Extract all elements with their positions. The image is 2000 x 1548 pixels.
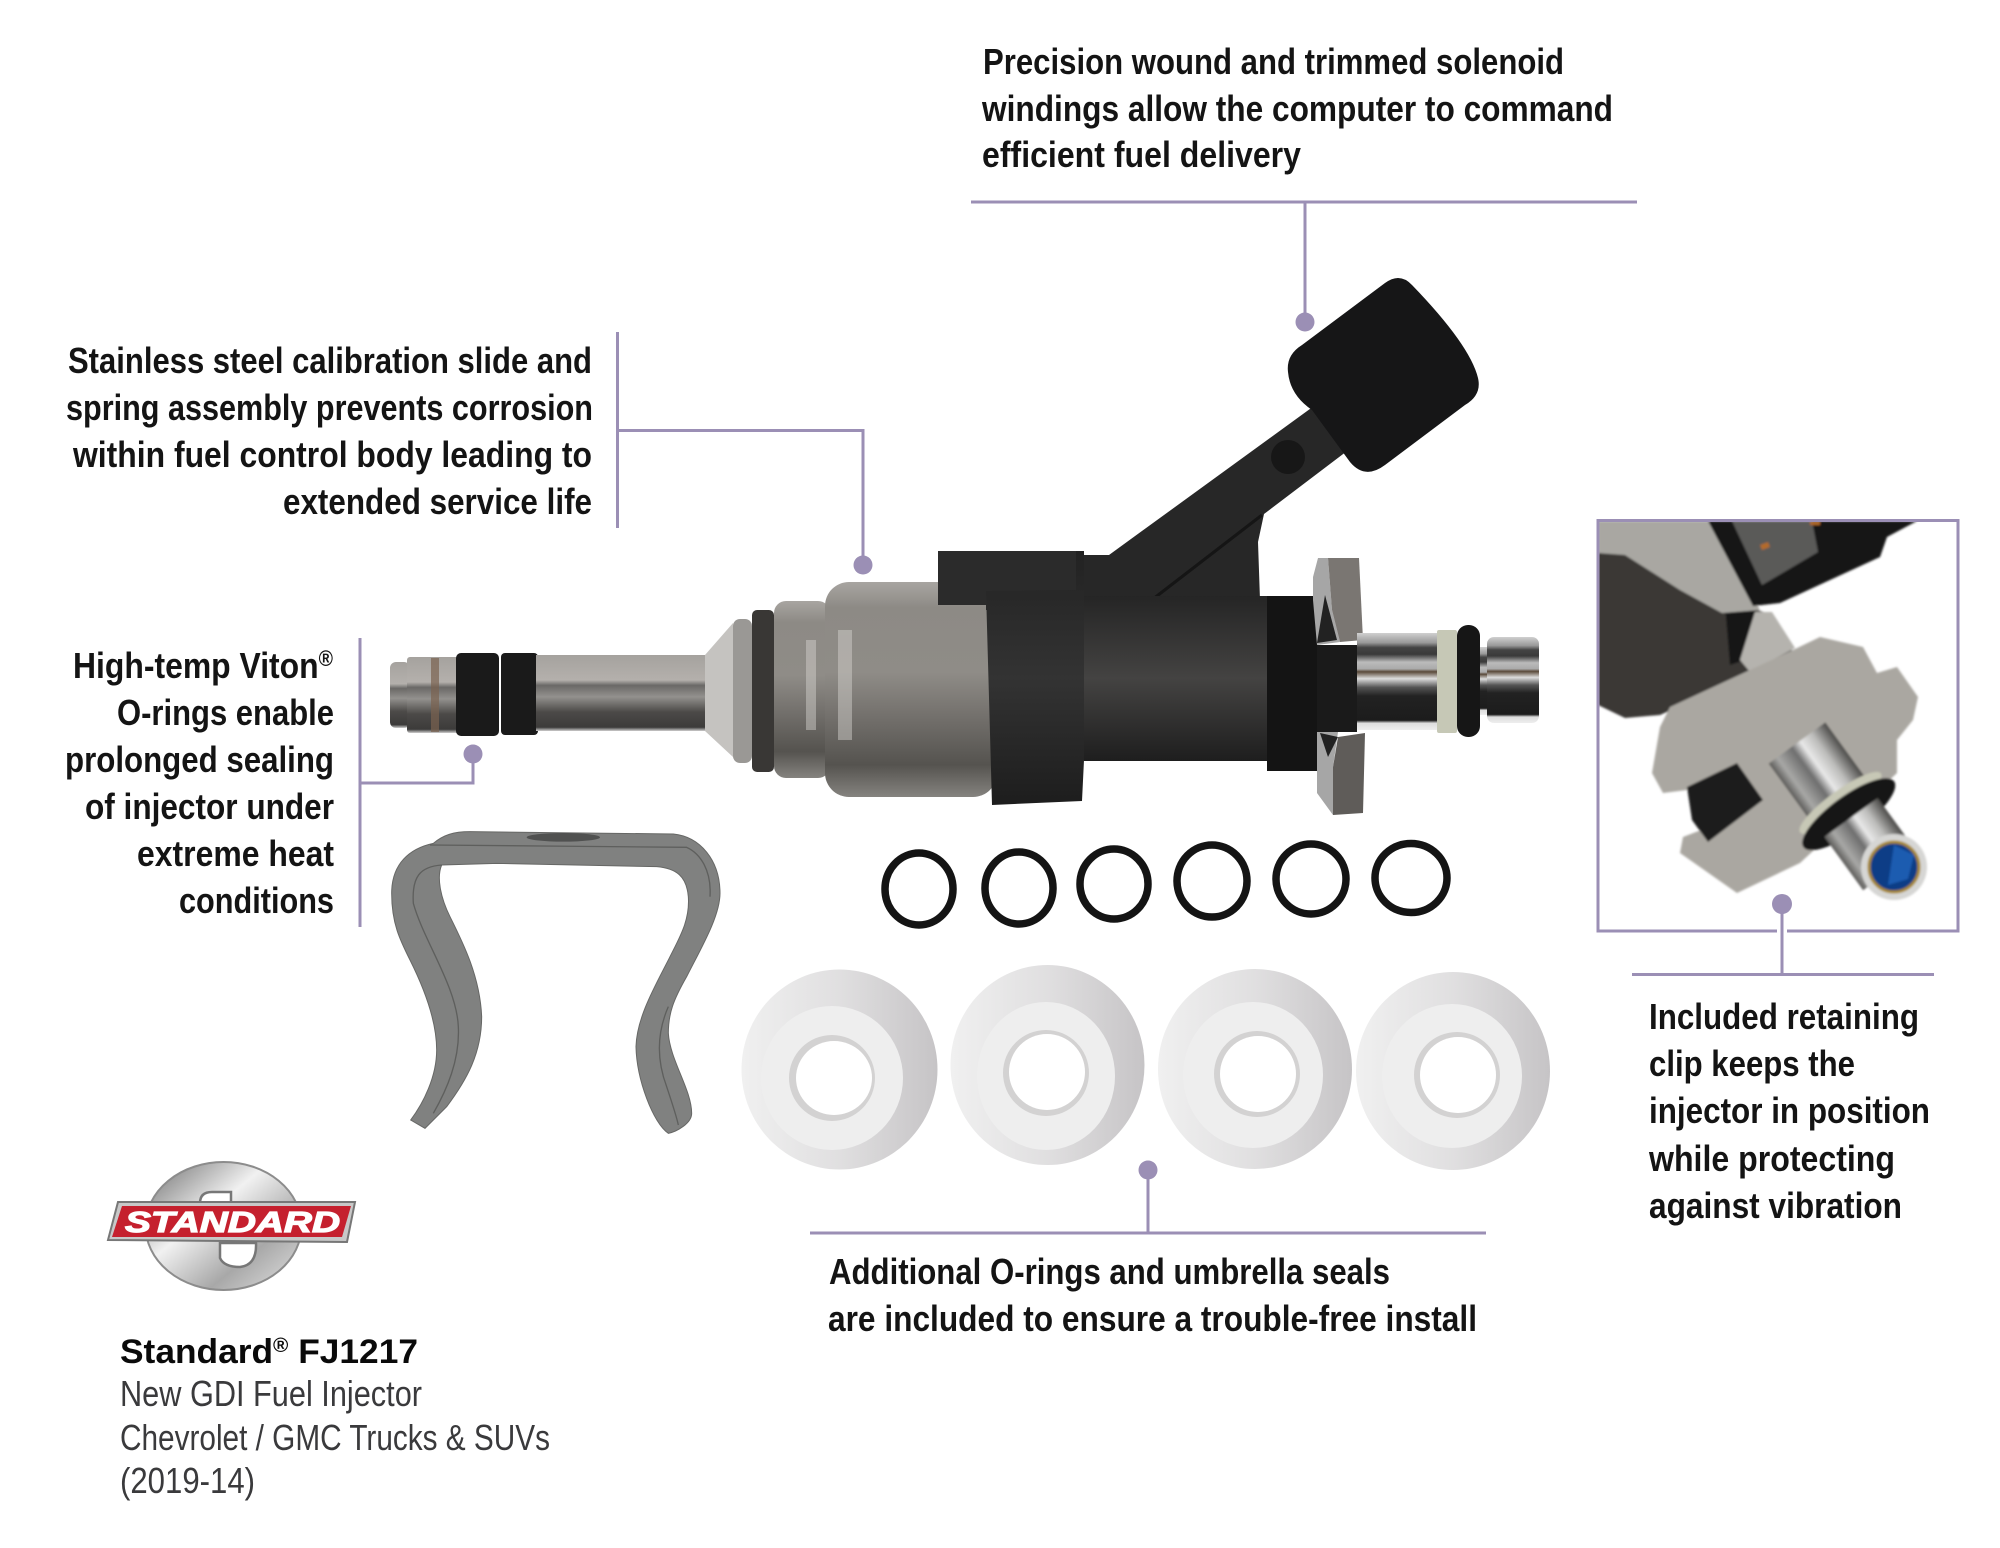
callout text: seals: are included to ensure a trouble-free install xyxy=(828,1298,1477,1339)
callout text: solenoid: efficient fuel delivery xyxy=(982,134,1301,175)
logo: red banner: STANDARD xyxy=(125,1207,340,1239)
seal 3 xyxy=(1158,969,1352,1169)
injector: rear collar xyxy=(1267,596,1317,771)
Standard logo xyxy=(108,1162,355,1290)
seal 2 xyxy=(950,965,1144,1165)
callout text: Viton O-rings: ® xyxy=(319,646,333,671)
inset: injector end face xyxy=(1861,834,1927,900)
inset: shaft and tip xyxy=(1768,722,1906,892)
callout: solenoid windings xyxy=(971,41,1637,332)
clip slot xyxy=(527,833,600,842)
clip details xyxy=(413,845,710,1125)
injector: nozzle O-rings xyxy=(456,653,538,736)
callout text: Viton O-rings xyxy=(65,645,334,921)
inset: silver casting xyxy=(1598,521,1760,613)
callout text: calibration slide: within fuel control body leading to xyxy=(72,434,592,475)
callout text: retaining clip: against vibration xyxy=(1649,1185,1902,1226)
injector: stainless body xyxy=(825,582,997,797)
product description: (2019-14) xyxy=(120,1460,255,1501)
callout text: calibration slide: spring assembly prevents corrosion xyxy=(66,387,593,428)
injector: white washer xyxy=(1437,630,1457,733)
inset: black clip tab xyxy=(1687,763,1763,842)
injector: arm screw mark xyxy=(1271,440,1305,474)
inset: black gap below connector xyxy=(1725,611,1754,665)
callout text: Viton O-rings: High-temp Viton xyxy=(73,645,350,686)
leader line: retaining clip xyxy=(1632,894,1934,974)
inset photo: retaining clip installed xyxy=(1598,520,1958,1226)
callout text: Viton O-rings: of injector under xyxy=(85,786,334,827)
leader line: seals xyxy=(810,1160,1486,1233)
product info xyxy=(120,1333,550,1501)
retaining clip xyxy=(392,832,720,1133)
injector: body highlights xyxy=(806,630,852,740)
callout: O-rings and umbrella seals xyxy=(810,1160,1486,1339)
injector: lower nozzle tip xyxy=(390,657,459,733)
flange centre block xyxy=(1317,645,1357,732)
injector: grooved section xyxy=(733,601,830,778)
seal 1 xyxy=(742,970,938,1170)
callout: Viton O-rings xyxy=(65,638,482,927)
leader line: calibration slide xyxy=(618,332,872,574)
injector: neck xyxy=(1478,647,1490,715)
logo: red banner xyxy=(108,1202,355,1242)
logo: silver S emblem xyxy=(146,1162,302,1290)
callout text: solenoid: windings allow the computer to command xyxy=(981,88,1613,129)
callout text: seals xyxy=(828,1251,1477,1339)
injector: cone xyxy=(705,623,733,757)
injector: top cap xyxy=(1487,637,1539,723)
seal 4 xyxy=(1356,972,1550,1170)
product description xyxy=(120,1373,550,1501)
injector: flange plate xyxy=(1313,558,1365,815)
callout text: calibration slide: Stainless steel calibration slide and xyxy=(68,340,592,381)
inset photo contents xyxy=(1598,521,1935,904)
injector: arm gusset groove xyxy=(1090,515,1262,628)
callout text: Viton O-rings: extreme heat xyxy=(137,833,334,874)
injector: black housing xyxy=(1084,596,1268,761)
inset: dark housing xyxy=(1598,540,1795,718)
product description: Chevrolet / GMC Trucks & SUVs xyxy=(120,1417,550,1458)
flange upper tab xyxy=(1313,558,1363,645)
callout text: retaining clip xyxy=(1648,996,1930,1226)
injector: electrical connector xyxy=(1288,278,1479,472)
injector: connector arm and gusset xyxy=(1084,398,1355,600)
inset: connector xyxy=(1708,521,1917,606)
product description: New GDI Fuel Injector xyxy=(120,1373,422,1414)
callout text: Viton O-rings: conditions xyxy=(179,880,334,921)
product name: ® xyxy=(273,1335,289,1357)
inset frame xyxy=(1598,520,1958,931)
callout text: seals: Additional O-rings and umbrella seals xyxy=(829,1251,1390,1292)
callout text: solenoid: Precision wound and trimmed solenoid xyxy=(983,41,1564,82)
injector: upper shaft xyxy=(1357,633,1439,730)
injector: upper O-ring xyxy=(1457,625,1480,737)
leader line: Viton O-rings xyxy=(360,638,482,927)
callout: calibration slide xyxy=(66,332,872,574)
inset: silver neck xyxy=(1740,612,1795,672)
product name: Standard xyxy=(120,1333,267,1371)
injector: top tab xyxy=(938,551,1076,610)
callout text: Viton O-rings: O-rings enable xyxy=(117,692,334,733)
callout text: calibration slide xyxy=(66,340,593,522)
inset: silver flange plate xyxy=(1652,637,1918,893)
small O-rings xyxy=(885,844,1447,925)
callout text: calibration slide: extended service life xyxy=(283,481,592,522)
callout text: retaining clip: injector in position xyxy=(1649,1090,1930,1131)
callout text: Viton O-rings: prolonged sealing xyxy=(65,739,334,780)
callout text: retaining clip: while protecting xyxy=(1648,1138,1895,1179)
callout text: retaining clip: clip keeps the xyxy=(1649,1043,1855,1084)
fuel injector photo xyxy=(390,278,1539,815)
callout text: retaining clip: Included retaining xyxy=(1649,996,1919,1037)
product name: FJ1217 xyxy=(288,1333,418,1371)
flange lower tab xyxy=(1317,732,1365,815)
clip body xyxy=(392,832,720,1133)
injector: nozzle shaft xyxy=(536,655,706,731)
leader line: solenoid xyxy=(971,202,1637,332)
umbrella seals xyxy=(742,965,1550,1170)
callout text: solenoid xyxy=(981,41,1613,175)
injector: black band xyxy=(986,551,1084,805)
